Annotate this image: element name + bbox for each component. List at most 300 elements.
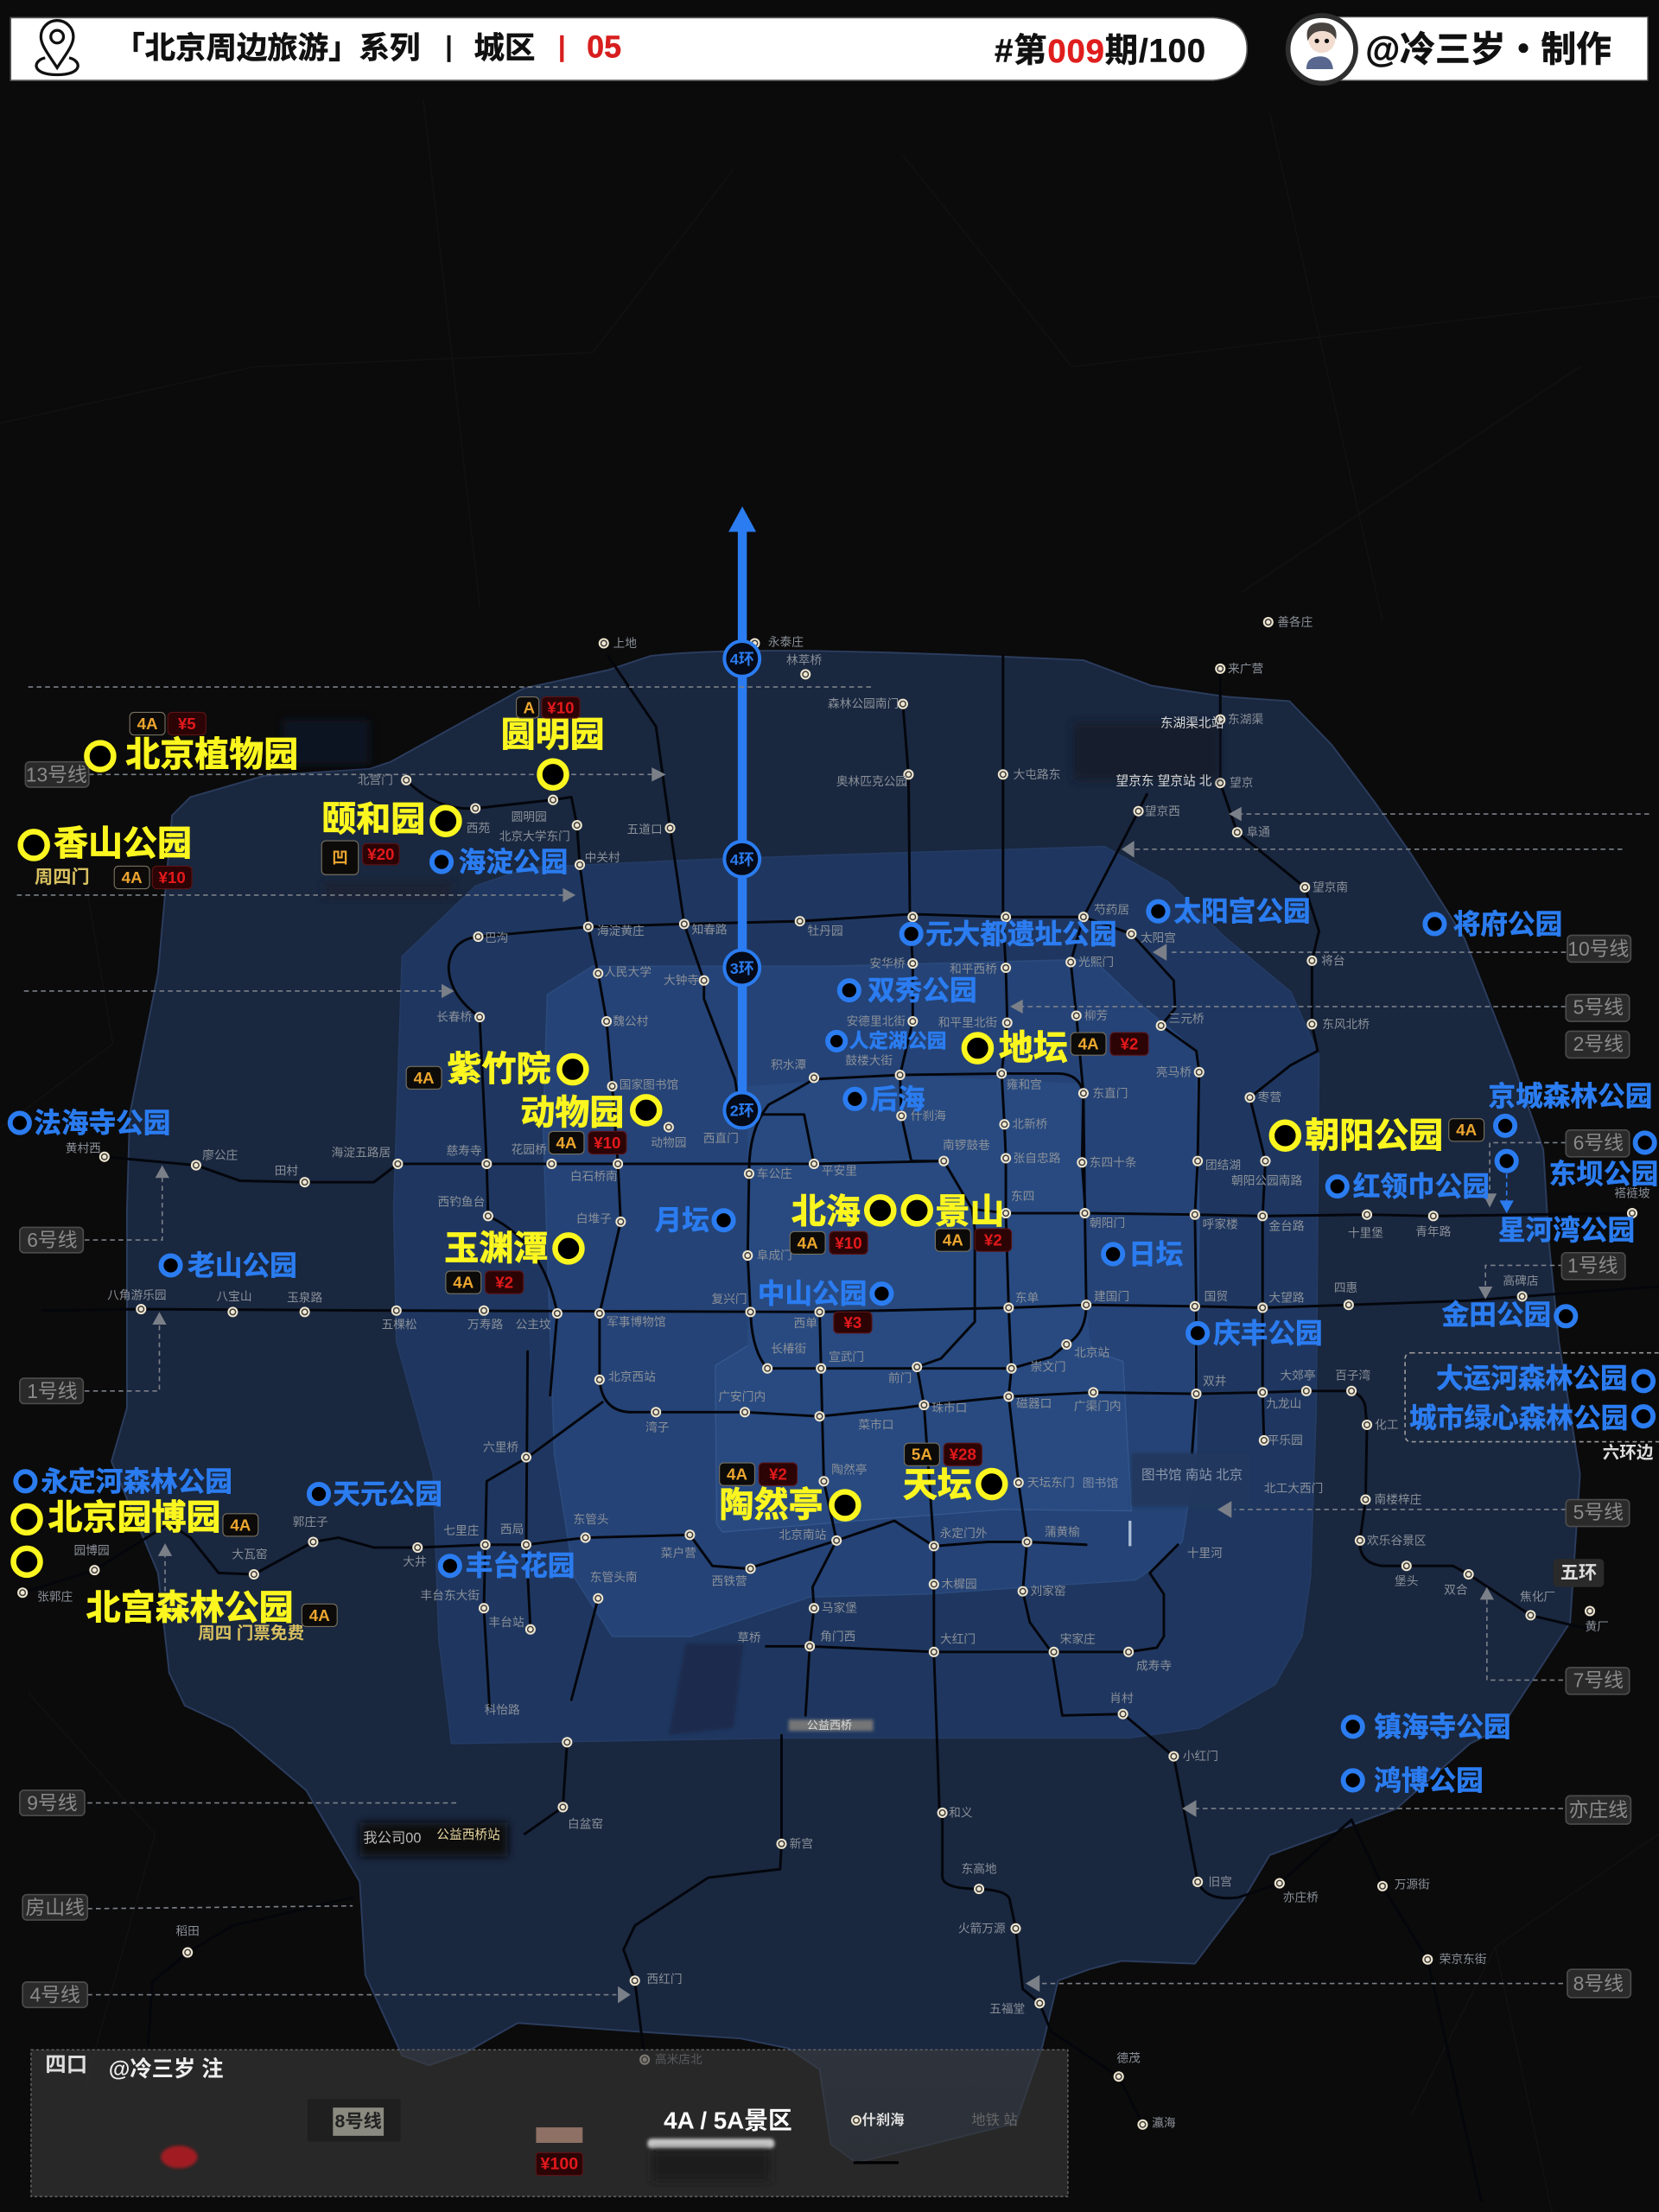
- POI: 星河湾公园: 星河湾公园: [1498, 1215, 1635, 1246]
- metro stations and names: 永定门外: [940, 1527, 988, 1540]
- metro stations and names: 安华桥: [869, 957, 906, 970]
- POI: 天坛: [903, 1443, 1005, 1504]
- metro stations and names: 光熙门: [1078, 956, 1114, 969]
- POI: 庆丰公园: 庆丰公园: [1213, 1318, 1323, 1349]
- POI marker: 园博园 extra: [14, 1548, 41, 1575]
- metro stations and names: 蒲黄榆: [1045, 1526, 1080, 1539]
- metro stations and names: 望京西: [1145, 804, 1180, 817]
- metro stations and names: 高米店北: [655, 2052, 702, 2066]
- metro stations and names: 褡裢坡: [1614, 1187, 1650, 1200]
- smudged map patches: [283, 716, 1323, 1857]
- metro stations and names: 牡丹园: [808, 925, 843, 938]
- POI: 北海: ¥10: [835, 1234, 862, 1252]
- POI: 北京植物园: ¥5: [178, 715, 196, 733]
- metro stations and names: 三元桥: [1169, 1012, 1205, 1025]
- metro stations and names: 稻田: [175, 1925, 200, 1938]
- metro stations and names: 成寿寺: [1136, 1659, 1172, 1673]
- POI: 动物园: 4A: [556, 1134, 577, 1152]
- POI: 中山公园: [758, 1278, 892, 1333]
- metro stations and names: [17, 614, 1650, 2130]
- line tag: 5号线 south with arrow: 5号线: [1573, 1501, 1624, 1523]
- map zone: central ring area: [715, 1075, 1131, 1532]
- POI: 将府公园: 将府公园: [1453, 908, 1562, 939]
- line tag: 6号线 right with arrow: 6号线: [1573, 1131, 1624, 1154]
- author bar: [1288, 16, 1648, 83]
- POI: 香山公园: ¥10: [159, 868, 186, 887]
- POI: 香山公园: 周四门: [35, 867, 90, 887]
- metro stations and names: 园博园: [74, 1543, 110, 1557]
- metro stations and names: 万寿路: [467, 1318, 503, 1332]
- metro stations and names: 崇文门: [1031, 1361, 1066, 1374]
- POI: 老山公园: 老山公园: [188, 1249, 297, 1281]
- metro stations and names: 复兴门: [712, 1292, 747, 1306]
- metro stations and names: 森林公园南门: [828, 697, 899, 710]
- metro stations and names: 四惠: [1334, 1281, 1357, 1294]
- metro stations and names: 积水潭: [771, 1058, 807, 1071]
- POI: 圆明园: A: [523, 698, 535, 716]
- metro stations and names: 张郭庄: [37, 1590, 73, 1604]
- metro stations and names: 安德里北街: [847, 1015, 906, 1028]
- issue counter: #第009期/100: [995, 32, 1206, 69]
- POI: 天元公园: 天元公园: [333, 1478, 442, 1510]
- metro stations and names: 林萃桥: [786, 654, 822, 667]
- metro stations and names: 十里堡: [1348, 1226, 1383, 1239]
- metro stations and names: 白盆窑: [568, 1817, 603, 1831]
- metro stations and names: 丰台东大街: [421, 1589, 480, 1602]
- metro stations and names: 花园桥: [512, 1143, 547, 1156]
- POI: 香山公园: 4A: [122, 868, 143, 887]
- metro stations and names: 西钓鱼台: [437, 1195, 485, 1209]
- line tag: 房山线: [22, 1895, 353, 1920]
- POI: 北京园博园: 北京园博园: [48, 1499, 221, 1537]
- metro stations and names: 阜成门: [757, 1249, 792, 1262]
- POI: 颐和园: 颐和园: [321, 801, 425, 839]
- metro stations and names: 黄厂: [1585, 1620, 1609, 1633]
- smudged map patches: 公益西桥站: [436, 1827, 500, 1842]
- metro stations and names: 南锣鼓巷: [943, 1139, 990, 1152]
- POI: 中山公园: 中山公园: [758, 1278, 867, 1309]
- metro stations and names: 来广营: [1228, 662, 1263, 675]
- metro stations and names: 科怡路: [485, 1703, 520, 1716]
- metro stations and names: 东风北桥: [1322, 1018, 1370, 1031]
- POI: 圆明园: 圆明园: [501, 716, 605, 754]
- smudged map patches: 图书馆: [1083, 1476, 1118, 1490]
- POI: 颐和园: [321, 801, 459, 874]
- POI: 金田公园: 金田公园: [1442, 1300, 1551, 1331]
- line tag: 亦庄线 with arrow: 亦庄线: [1569, 1799, 1628, 1821]
- POI: 动物园: 动物园: [520, 1094, 624, 1132]
- metro stations and names: 化工: [1375, 1418, 1399, 1431]
- metro stations and names: 火箭万源: [958, 1921, 1006, 1935]
- metro stations and names: 五道口: [627, 823, 663, 836]
- legend metro sample: [308, 2099, 401, 2141]
- metro stations and names: 高碑店: [1503, 1274, 1539, 1287]
- metro stations and names: 东管头南: [590, 1571, 638, 1584]
- metro stations and names: 团结湖: [1205, 1159, 1241, 1172]
- POI: 中山公园: ¥3: [844, 1313, 861, 1332]
- metro stations and names: 大井: [403, 1555, 427, 1568]
- legend scenic area sample: [647, 2139, 774, 2181]
- metro lines: [22, 656, 1659, 2201]
- metro stations and names: 国家图书馆: [620, 1077, 678, 1091]
- metro stations and names: 旧宫: [1209, 1875, 1232, 1888]
- metro stations and names: 广渠门内: [1074, 1400, 1122, 1413]
- POI: 景山: 4A: [943, 1231, 963, 1249]
- POI: 天坛: 5A: [912, 1446, 932, 1464]
- legend price badge: [536, 2127, 582, 2176]
- POI: 北海: [790, 1192, 893, 1254]
- metro stations and names: 东湖渠: [1228, 713, 1263, 726]
- POI: 后海: 后海: [870, 1084, 925, 1115]
- ring axis with north arrow: 4环: [730, 851, 754, 868]
- POI: 北京园博园: 4A: [230, 1516, 251, 1534]
- metro stations and names: 菜户营: [661, 1546, 696, 1560]
- metro stations and names: 朝阳门: [1090, 1217, 1125, 1230]
- POI: 月坛: [655, 1205, 734, 1236]
- dashed box: forest parks: [1405, 1353, 1659, 1442]
- POI: 地坛: 4A: [1078, 1035, 1099, 1053]
- metro stations and names: 黄村西: [66, 1141, 101, 1154]
- metro stations and names: 十里河: [1187, 1547, 1223, 1560]
- issue number red: [560, 29, 621, 64]
- title: 「北京周边旅游」系列: [114, 31, 420, 66]
- metro stations and names: 南楼梓庄: [1375, 1492, 1422, 1506]
- POI: 朝阳公园: 朝阳公园: [1305, 1116, 1443, 1154]
- arrow: 北宫森林公园 up: [158, 1543, 172, 1592]
- metro stations and names: 前门: [888, 1371, 912, 1385]
- POI: 地坛: ¥2: [1121, 1035, 1138, 1053]
- POI: 颐和园: 凹: [332, 849, 348, 867]
- POI: 动物园: [520, 1094, 659, 1154]
- metro stations and names: 双合: [1444, 1583, 1468, 1596]
- POI: 北京植物园: 北京植物园: [125, 735, 298, 773]
- metro stations and names: 大望路: [1268, 1292, 1305, 1305]
- metro stations and names: 珠市口: [931, 1401, 967, 1414]
- arrow: blue down: [1500, 1173, 1514, 1213]
- metro stations and names: 北宫门: [358, 773, 393, 786]
- metro stations and names: 木樨园: [942, 1578, 977, 1591]
- POI: 地坛: [964, 1029, 1148, 1067]
- POI: 后海: [845, 1084, 925, 1115]
- POI: 北海: 北海: [791, 1192, 861, 1230]
- line tag: 1号线 left with arrow: [20, 1312, 167, 1403]
- metro stations and names: 阜通: [1247, 825, 1270, 839]
- metro stations and names: 草桥: [737, 1631, 761, 1644]
- POI: 双秀公园: 双秀公园: [868, 975, 977, 1006]
- line tag: 7号线 with arrow: [1480, 1587, 1630, 1694]
- POI: 京城森林公园: 京城森林公园: [1488, 1081, 1652, 1112]
- metro stations and names: 将台: [1321, 954, 1345, 967]
- metro stations and names: 国贸: [1205, 1290, 1228, 1303]
- metro stations and names: 鼓楼大街: [845, 1054, 893, 1067]
- metro stations and names: 慈寿寺: [447, 1144, 482, 1158]
- POI: 北宫森林公园: 4A: [309, 1606, 330, 1624]
- line tag: 1号线 left with arrow: 1号线: [27, 1380, 78, 1402]
- metro stations and names: 朝阳公园南路: [1231, 1174, 1303, 1187]
- metro stations and names: 望京: [1230, 777, 1253, 790]
- metro stations and names: 东管头: [574, 1513, 609, 1526]
- metro stations and names: 动物园: [651, 1136, 686, 1149]
- POI marker: 京城森林公园 extra: [1497, 1152, 1516, 1171]
- metro stations and names: 肖村: [1109, 1692, 1134, 1705]
- legend red marker: [161, 2145, 198, 2168]
- metro stations and names: 菜市口: [858, 1417, 893, 1431]
- legend author note: @冷三岁 注: [109, 2057, 224, 2082]
- metro stations and names: 大郊亭: [1280, 1368, 1316, 1382]
- metro stations and names: 圆明园: [512, 810, 547, 823]
- metro stations and names: 宣武门: [829, 1351, 864, 1363]
- POI: 紫竹院: [406, 1051, 586, 1089]
- line tag: 6号线 right with arrow: [1483, 1130, 1630, 1208]
- line tag: 1号线 right with arrow: [1478, 1253, 1625, 1300]
- POI: 圆明园: [501, 697, 605, 788]
- ring tag: 五环: [1554, 1559, 1604, 1587]
- metro stations and names: 东高地: [962, 1862, 997, 1876]
- legend scenic area label: 4A / 5A景区: [664, 2107, 792, 2133]
- metro stations and names: 和平西桥: [950, 963, 997, 976]
- metro stations and names: 永泰庄: [768, 634, 804, 648]
- ring axis with north arrow: 3环: [730, 960, 754, 977]
- metro stations and names: 公主坟: [516, 1319, 551, 1332]
- line tag: 6号线 left with arrow: 6号线: [27, 1229, 78, 1251]
- map zone: middle ring area: [394, 847, 1319, 1744]
- POI: 香山公园: 香山公园: [54, 824, 192, 862]
- POI: 天坛: ¥28: [950, 1446, 976, 1464]
- header bar: [10, 17, 1247, 80]
- metro stations and names: 双井: [1203, 1375, 1226, 1388]
- arrow: guide to 巴沟: [24, 984, 454, 998]
- POI: 景山: ¥2: [984, 1231, 1002, 1249]
- POI: 永定河森林公园: 永定河森林公园: [41, 1465, 232, 1497]
- metro stations and names: 天坛东门: [1027, 1476, 1075, 1489]
- metro stations and names: 北京南站: [779, 1529, 827, 1541]
- line tag: 4号线 with arrow: [22, 1982, 631, 2007]
- line tag: 房山线: 房山线: [25, 1896, 85, 1918]
- POI: 日坛: [1103, 1238, 1183, 1269]
- metro stations and names: 百子湾: [1335, 1368, 1371, 1382]
- line tag: 2号线: [1566, 1031, 1630, 1058]
- POI: 北宫森林公园: [86, 1589, 337, 1643]
- POI: 陶然亭: 陶然亭: [720, 1486, 823, 1524]
- metro stations and names: 西直门: [703, 1132, 739, 1145]
- line tag: 8号线 with arrow: 8号线: [1573, 1973, 1624, 1995]
- legend station sample: 什刹海: [862, 2113, 905, 2128]
- metro stations and names: 西红门: [646, 1973, 683, 1986]
- legend metro sample: 8号线: [335, 2111, 382, 2132]
- legend faint text: 地铁 站: [971, 2113, 1018, 2128]
- icon: location pin: [36, 21, 78, 75]
- metro stations and names: 西苑: [467, 822, 490, 835]
- author name: @冷三岁・制作: [1365, 29, 1611, 69]
- POI: 陶然亭: ¥2: [769, 1465, 787, 1484]
- POI: 玉渊潭: 玉渊潭: [444, 1230, 548, 1268]
- arrow: top right guide two: [1122, 841, 1623, 858]
- panel: legend: [31, 2050, 1068, 2196]
- POI: 城市绿心森林公园: 城市绿心森林公园: [1409, 1402, 1628, 1433]
- POI: 陶然亭: [720, 1463, 858, 1524]
- POI: 北京植物园: 4A: [137, 715, 158, 733]
- metro stations and names: 焦化厂: [1520, 1591, 1555, 1604]
- metro stations and names: 广安门内: [718, 1390, 766, 1403]
- metro stations and names: 魏公村: [613, 1015, 649, 1028]
- POI: 京城森林公园: [1488, 1081, 1652, 1135]
- metro stations and names: 郭庄子: [293, 1515, 328, 1529]
- metro stations and names: 知春路: [692, 922, 728, 936]
- POI: 东坝公园: 东坝公园: [1549, 1158, 1658, 1189]
- arrow: top right guide one: [1229, 807, 1649, 821]
- POI: 天坛: 天坛: [903, 1466, 972, 1504]
- smudged map patches: 我公司00: [363, 1830, 421, 1846]
- metro stations and names: 枣营: [1258, 1091, 1281, 1104]
- line tag: 7号线 with arrow: 7号线: [1573, 1669, 1624, 1691]
- metro stations and names: 陶然亭: [831, 1463, 867, 1477]
- metro stations and names: 五棵松: [381, 1319, 417, 1332]
- metro stations and names: 西局: [500, 1522, 524, 1535]
- map zone: lower central outline: [715, 1346, 1131, 1532]
- smudged map patches: 公益西桥: [807, 1719, 852, 1732]
- metro stations and names: 小红门: [1183, 1750, 1218, 1763]
- metro stations and names: 八角游乐园: [107, 1288, 167, 1301]
- divider and district: [448, 31, 535, 66]
- arrow: guide to 海淀黄庄: [17, 888, 575, 902]
- metro stations and names: 张自忠路: [1014, 1152, 1061, 1165]
- metro stations and names: 平安里: [822, 1165, 857, 1178]
- POI: 玉渊潭: ¥2: [495, 1274, 513, 1292]
- metro stations and names: 丰台站: [489, 1616, 524, 1629]
- POI: 日坛: 日坛: [1128, 1238, 1183, 1269]
- line tag: 10号线 with arrow: [1153, 935, 1630, 962]
- POI: 大运河森林公园: 大运河森林公园: [1436, 1363, 1628, 1394]
- POI: 景山: 景山: [935, 1192, 1004, 1230]
- metro stations and names: 角门西: [820, 1630, 855, 1643]
- metro stations and names: 大钟寺: [664, 973, 699, 987]
- metro stations and names: 海淀五路居: [332, 1146, 391, 1159]
- line tag: 13号线 with arrow: [25, 762, 666, 787]
- POI: 人定湖公园: 人定湖公园: [849, 1030, 946, 1052]
- legend price badge: ¥100: [541, 2154, 578, 2173]
- metro stations and names: 上地: [613, 637, 637, 650]
- ring axis with north arrow: 2环: [730, 1103, 754, 1120]
- metro stations and names: 中关村: [585, 851, 620, 864]
- POI: 地坛: 地坛: [999, 1029, 1068, 1067]
- line tag: 6号线 left with arrow: [20, 1166, 169, 1253]
- ring axis with north arrow: [724, 506, 760, 1128]
- metro stations and names: 湾子: [645, 1421, 670, 1434]
- POI: 月坛: 月坛: [655, 1205, 709, 1236]
- line tag: 1号线 right with arrow: 1号线: [1567, 1254, 1618, 1276]
- metro stations and names: 宋家庄: [1060, 1632, 1096, 1646]
- metro stations and names: 瀛海: [1152, 2116, 1176, 2130]
- metro stations and names: 北新桥: [1012, 1118, 1048, 1131]
- metro stations and names: 大屯路东: [1014, 768, 1060, 781]
- metro stations and names: 荣京东街: [1440, 1953, 1487, 1966]
- POI: 元大都遗址公园: 元大都遗址公园: [925, 918, 1117, 950]
- POI: 紫竹院: 紫竹院: [448, 1051, 551, 1089]
- POI: 朝阳公园: 4A: [1456, 1121, 1478, 1139]
- line tag: 5号线 with arrow: [1010, 995, 1630, 1021]
- line tag: 8号线 with arrow: [1026, 1969, 1630, 1998]
- metro stations and names: 九龙山: [1266, 1397, 1301, 1410]
- metro stations and names: 新宫: [790, 1837, 813, 1850]
- metro stations and names: 八宝山: [216, 1290, 252, 1303]
- metro stations and names: 奥林匹克公园: [836, 774, 907, 788]
- line tag: 13号线 with arrow: 13号线: [26, 763, 87, 785]
- metro stations and names: 长春桥: [436, 1011, 473, 1024]
- metro stations and names: 巴沟: [485, 931, 508, 944]
- POI: 陶然亭: 4A: [727, 1465, 747, 1484]
- line tag: 9号线: [20, 1790, 459, 1815]
- metro stations and names: 雍和宫: [1007, 1078, 1042, 1091]
- metro stations and names: 青年路: [1415, 1225, 1452, 1238]
- ring note: 六环边: 六环边: [1603, 1444, 1654, 1463]
- metro stations and names: 玉泉路: [287, 1291, 323, 1305]
- metro stations and names: 田村: [275, 1165, 298, 1178]
- metro stations and names: 什刹海: [911, 1109, 946, 1122]
- metro stations and names: 白石桥南: [570, 1170, 618, 1183]
- metro stations and names: 长椿街: [771, 1342, 807, 1355]
- metro stations and names: 东直门: [1092, 1087, 1128, 1100]
- ring axis with north arrow: 4环: [730, 651, 754, 668]
- metro stations and names: 东四十条: [1090, 1155, 1137, 1169]
- POI: 北宫森林公园: 北宫森林公园: [86, 1589, 294, 1627]
- metro stations and names: 建国门: [1094, 1290, 1129, 1303]
- POI: 丰台花园: 丰台花园: [466, 1550, 575, 1581]
- legend smudged logo: 四口: [45, 2054, 87, 2077]
- metro stations and names: 堡头: [1395, 1575, 1418, 1588]
- POI: 北海: 4A: [798, 1234, 818, 1252]
- POI: 圆明园: ¥10: [547, 698, 575, 716]
- POI: 玉渊潭: [444, 1230, 582, 1294]
- POI: 法海寺公园: 法海寺公园: [34, 1108, 170, 1139]
- POI: 东坝公园: [1549, 1133, 1658, 1189]
- POI: 玉渊潭: 4A: [453, 1274, 474, 1292]
- POI: 镇海寺公园: 镇海寺公园: [1374, 1711, 1511, 1742]
- metro stations and names: 芍药居: [1094, 904, 1129, 917]
- metro stations and names: 东四: [1011, 1190, 1034, 1203]
- metro stations and names: 白堆子: [576, 1212, 612, 1225]
- issue number red: 05: [587, 29, 621, 64]
- metro stations and names: 北京站: [1074, 1346, 1110, 1359]
- metro stations and names: 亮马桥: [1156, 1065, 1192, 1078]
- line tag: 10号线 with arrow: 10号线: [1567, 938, 1629, 960]
- POI: 紫竹院: 4A: [414, 1069, 435, 1087]
- line tag: 5号线 south with arrow: [1217, 1500, 1630, 1527]
- smudged map patches: 北工大西门: [1264, 1482, 1323, 1495]
- metro stations and names: 海淀黄庄: [597, 924, 645, 938]
- metro stations and names: 东单: [1015, 1292, 1039, 1305]
- line tag: 5号线 with arrow: 5号线: [1573, 996, 1624, 1019]
- metro stations and names: 磁器口: [1016, 1397, 1052, 1410]
- smudged map patches: 望京东 望京站 北: [1116, 773, 1212, 788]
- metro stations and names: 西铁营: [712, 1575, 747, 1588]
- metro stations and names: 马家堡: [822, 1601, 857, 1615]
- POI: 动物园: ¥10: [594, 1134, 621, 1152]
- POI: 朝阳公园: [1272, 1116, 1484, 1154]
- metro stations and names: 和义: [949, 1806, 973, 1819]
- arrow: unlabeled top guide: [29, 686, 874, 688]
- smudged map patches: 图书馆 南站 北京: [1141, 1467, 1243, 1483]
- line tag: 9号线: 9号线: [27, 1792, 78, 1815]
- metro stations and names: 大瓦窑: [232, 1548, 268, 1561]
- metro stations and names: 金台路: [1268, 1219, 1305, 1232]
- metro stations and names: 军事博物馆: [607, 1314, 666, 1328]
- line tag: 2号线: 2号线: [1573, 1033, 1624, 1055]
- metro stations and names: 大红门: [940, 1633, 976, 1646]
- map zone: inner ring area: [543, 959, 1199, 1637]
- metro stations and names: 望京南: [1313, 880, 1348, 893]
- POI: 太阳宫公园: 太阳宫公园: [1173, 896, 1311, 927]
- ring tag: 五环: 五环: [1560, 1563, 1597, 1583]
